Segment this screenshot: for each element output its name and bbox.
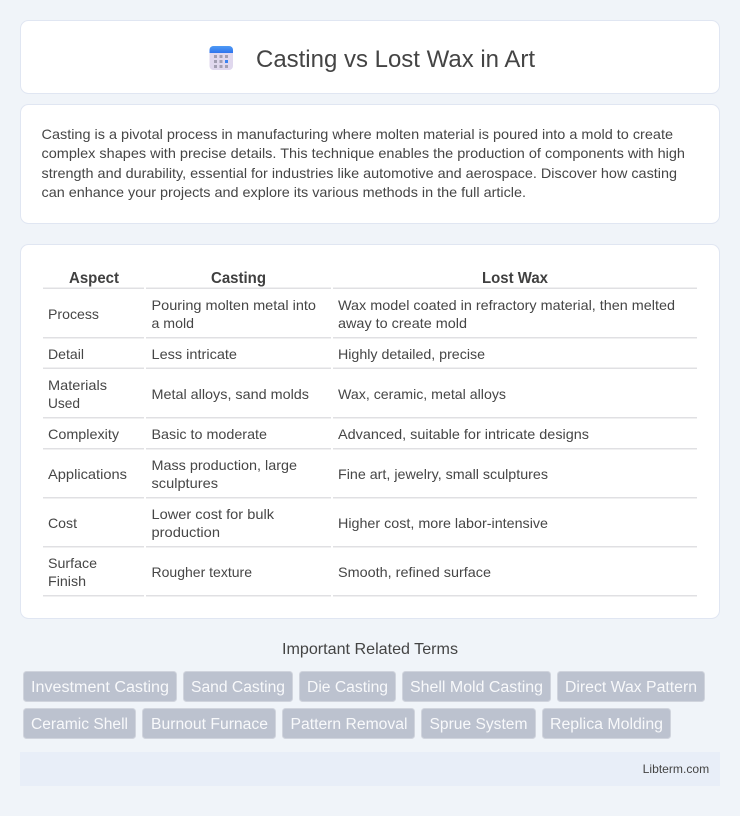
title: Casting vs Lost Wax in Art: [256, 46, 535, 73]
row: materials used: Metal alloys, sand molds: [152, 386, 309, 402]
table header: [69, 270, 548, 287]
panel: title header: [20, 20, 720, 94]
tag: [402, 672, 550, 702]
tag: [542, 708, 670, 738]
tag: Sprue System: [430, 716, 528, 733]
tag: Sand Casting: [191, 679, 285, 696]
row: cost: Cost: [48, 515, 77, 531]
row: applications: sculptures: [152, 475, 218, 491]
text block: introduction: complex shapes with precise details. This technique enables the production of components with high: [42, 145, 685, 161]
row: applications: Fine art, jewelry, small sculptures: [338, 466, 548, 482]
row: cost: Higher cost, more labor-intensive: [338, 515, 548, 531]
tag: [558, 672, 704, 702]
row: complexity: Advanced, suitable for intricate designs: [338, 426, 589, 442]
row: surface finish: Surface: [48, 555, 97, 571]
row: complexity: Basic to moderate: [152, 426, 267, 442]
row: cost: Lower cost for bulk: [152, 506, 275, 522]
tag: Investment Casting: [31, 679, 169, 696]
tag: [184, 672, 292, 702]
tag: Pattern Removal: [290, 716, 408, 733]
row: process: Wax model coated in refractory material, then melted: [338, 297, 675, 313]
table header: Aspect: [69, 270, 119, 287]
row: applications: Applications: [48, 466, 127, 482]
footer: Libterm.com: [643, 762, 709, 776]
text block: introduction: Casting is a pivotal process in manufacturing where molten material is poured into a mold to create: [42, 126, 673, 142]
text block: introduction: strength and durability, essential for industries like automotive and aerospace. Discover how casting: [42, 165, 677, 181]
row: applications: Mass production, large: [152, 457, 297, 473]
row: process: away to create mold: [338, 315, 467, 331]
table header: Lost Wax: [482, 270, 548, 287]
panel: related term tags: [24, 672, 704, 738]
tag: [422, 708, 536, 738]
heading: related terms: Important Related Terms: [282, 641, 458, 658]
tag: Replica Molding: [550, 716, 663, 733]
row: surface finish: Rougher texture: [152, 564, 252, 580]
tag: Direct Wax Pattern: [565, 679, 697, 696]
row: process: Process: [48, 306, 99, 322]
row: complexity: [48, 426, 589, 442]
tag: Die Casting: [307, 679, 388, 696]
tag: [300, 672, 396, 702]
row: cost: production: [152, 524, 220, 540]
panel: introduction: [20, 104, 720, 224]
panel: comparison table: [20, 244, 720, 618]
row: process: a mold: [152, 315, 194, 331]
icon: calendar: [210, 46, 233, 70]
row: applications: [48, 457, 548, 491]
row: materials used: [48, 377, 506, 411]
footer: [20, 752, 720, 786]
tag: Shell Mold Casting: [410, 679, 543, 696]
row: detail: [48, 346, 485, 362]
text block: introduction: can enhance your projects and explore its various methods in the full article.: [42, 184, 526, 200]
row: detail: Less intricate: [152, 346, 237, 362]
row: surface finish: Smooth, refined surface: [338, 564, 491, 580]
tag: [142, 708, 276, 738]
table header: Casting: [211, 270, 266, 287]
row: complexity: Complexity: [48, 426, 119, 442]
row: detail: Detail: [48, 346, 84, 362]
row: surface finish: [48, 555, 491, 589]
row: process: [48, 297, 675, 331]
tag: [282, 708, 414, 738]
row: materials used: Wax, ceramic, metal alloys: [338, 386, 506, 402]
row: materials used: Used: [48, 395, 80, 411]
row: surface finish: Finish: [48, 573, 86, 589]
row: materials used: Materials: [48, 377, 107, 393]
tag: [24, 672, 176, 702]
row: cost: [48, 506, 548, 540]
tag: Burnout Furnace: [151, 716, 268, 733]
row: detail: Highly detailed, precise: [338, 346, 485, 362]
tag: Ceramic Shell: [31, 716, 128, 733]
row: process: Pouring molten metal into: [152, 297, 316, 313]
tag: [24, 708, 136, 738]
text block: introduction: [42, 126, 685, 200]
